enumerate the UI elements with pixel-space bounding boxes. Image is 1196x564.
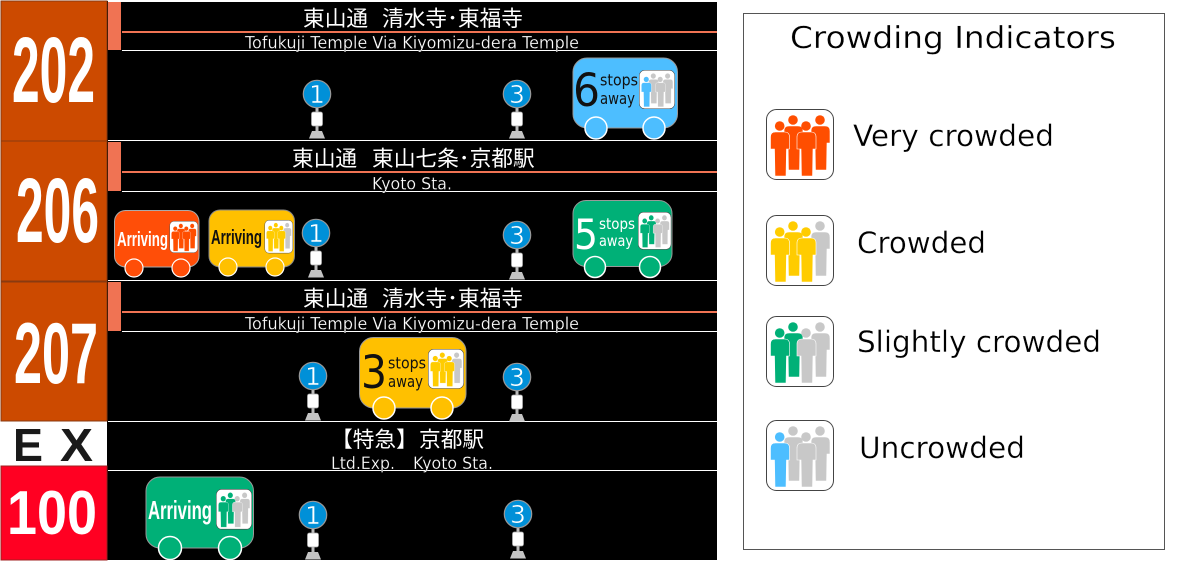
destination line [122, 311, 717, 313]
legend: slightly crowded [766, 316, 1101, 386]
bus 3 stops away: 3 [361, 346, 387, 399]
legend: crowded [766, 216, 986, 286]
stop 1 [299, 362, 327, 420]
stop 3 [503, 80, 531, 138]
legend: very crowded [766, 110, 1054, 180]
express 100 row [1, 419, 532, 560]
bus arriving slightly crowded [146, 477, 254, 560]
route number 202: 202 [12, 18, 95, 122]
destination English: Tofukuji Temple Via Kiyomizu-dera Temple [244, 34, 579, 52]
destination Japanese: 清水寺･東福寺 [382, 6, 523, 31]
stop 1 [303, 80, 331, 138]
stop 1: 1 [308, 219, 324, 248]
stop 3: 3 [510, 500, 526, 529]
bus arriving very crowded [114, 210, 199, 277]
destination line [122, 171, 717, 173]
destination Japanese: 京都駅 [419, 427, 484, 452]
destination Japanese: 東山通 [292, 146, 357, 171]
bus 6 stops away: 6 [573, 64, 600, 117]
route number 100: 100 [7, 479, 97, 548]
destination English: Kyoto Sta. [413, 454, 493, 473]
route colour tab [108, 282, 121, 331]
bus 3 stops away [360, 338, 466, 419]
stop 3 [503, 221, 531, 280]
legend: slightly crowded: Slightly crowded [857, 325, 1101, 359]
stop 3 [504, 500, 532, 558]
stop 3: 3 [509, 80, 525, 109]
bus 6 stops away: stops [600, 70, 638, 90]
legend: very crowded: Very crowded [853, 119, 1054, 153]
route number 100 [1, 466, 107, 560]
bus 5 stops away: stops [599, 215, 635, 233]
route number 206: 206 [16, 160, 99, 262]
bus 5 stops away: 5 [574, 210, 598, 259]
route 202 row [1, 1, 717, 141]
bus 6 stops away [573, 58, 678, 139]
stop 3 [503, 363, 531, 422]
bus 6 stops away: away [600, 89, 635, 108]
route number 206 [1, 141, 107, 281]
destination English: Tofukuji Temple Via Kiyomizu-dera Temple [244, 314, 579, 334]
destination Japanese: 清水寺･東福寺 [382, 286, 523, 311]
stop 3: 3 [509, 221, 525, 250]
stop 1: 1 [305, 501, 321, 530]
bus arriving very crowded: Arriving [117, 229, 168, 251]
destination Japanese: 東山通 [303, 6, 368, 31]
route number 202 [1, 1, 107, 141]
destination line [122, 31, 717, 33]
bus arriving crowded: Arriving [211, 227, 262, 249]
route 206 row [1, 141, 717, 281]
bus 5 stops away: away [599, 232, 633, 250]
EX label: E [13, 419, 43, 471]
route 207 row [1, 282, 717, 422]
stop 1 [302, 219, 330, 278]
EX label [1, 419, 107, 471]
destination Japanese: 【特急】 [331, 427, 418, 452]
legend: uncrowded [766, 420, 1025, 490]
legend title: Crowding Indicators [790, 21, 1116, 56]
stop 1: 1 [305, 362, 321, 391]
bus 3 stops away: stops [388, 354, 426, 372]
route colour tab [108, 2, 121, 50]
destination Japanese: 東山七条･京都駅 [372, 146, 535, 171]
route number 207 [1, 282, 107, 421]
destination Japanese: 東山通 [303, 286, 368, 311]
bus 3 stops away: away [388, 372, 423, 391]
legend: uncrowded: Uncrowded [859, 431, 1025, 465]
bus arriving slightly crowded: Arriving [148, 495, 212, 525]
stop 3: 3 [509, 363, 525, 392]
route number 207: 207 [14, 306, 98, 402]
departure board [107, 1, 717, 560]
stop 1: 1 [309, 80, 325, 109]
stop 1 [299, 501, 327, 560]
panel: crowding indicators legend [744, 14, 1164, 550]
legend: crowded: Crowded [857, 226, 986, 260]
destination English: Ltd.Exp. [331, 454, 395, 473]
bus arriving crowded [209, 210, 294, 276]
bus 5 stops away [573, 200, 672, 278]
destination English: Kyoto Sta. [372, 174, 452, 194]
route colour tab [108, 142, 121, 191]
EX label: X [60, 419, 93, 471]
